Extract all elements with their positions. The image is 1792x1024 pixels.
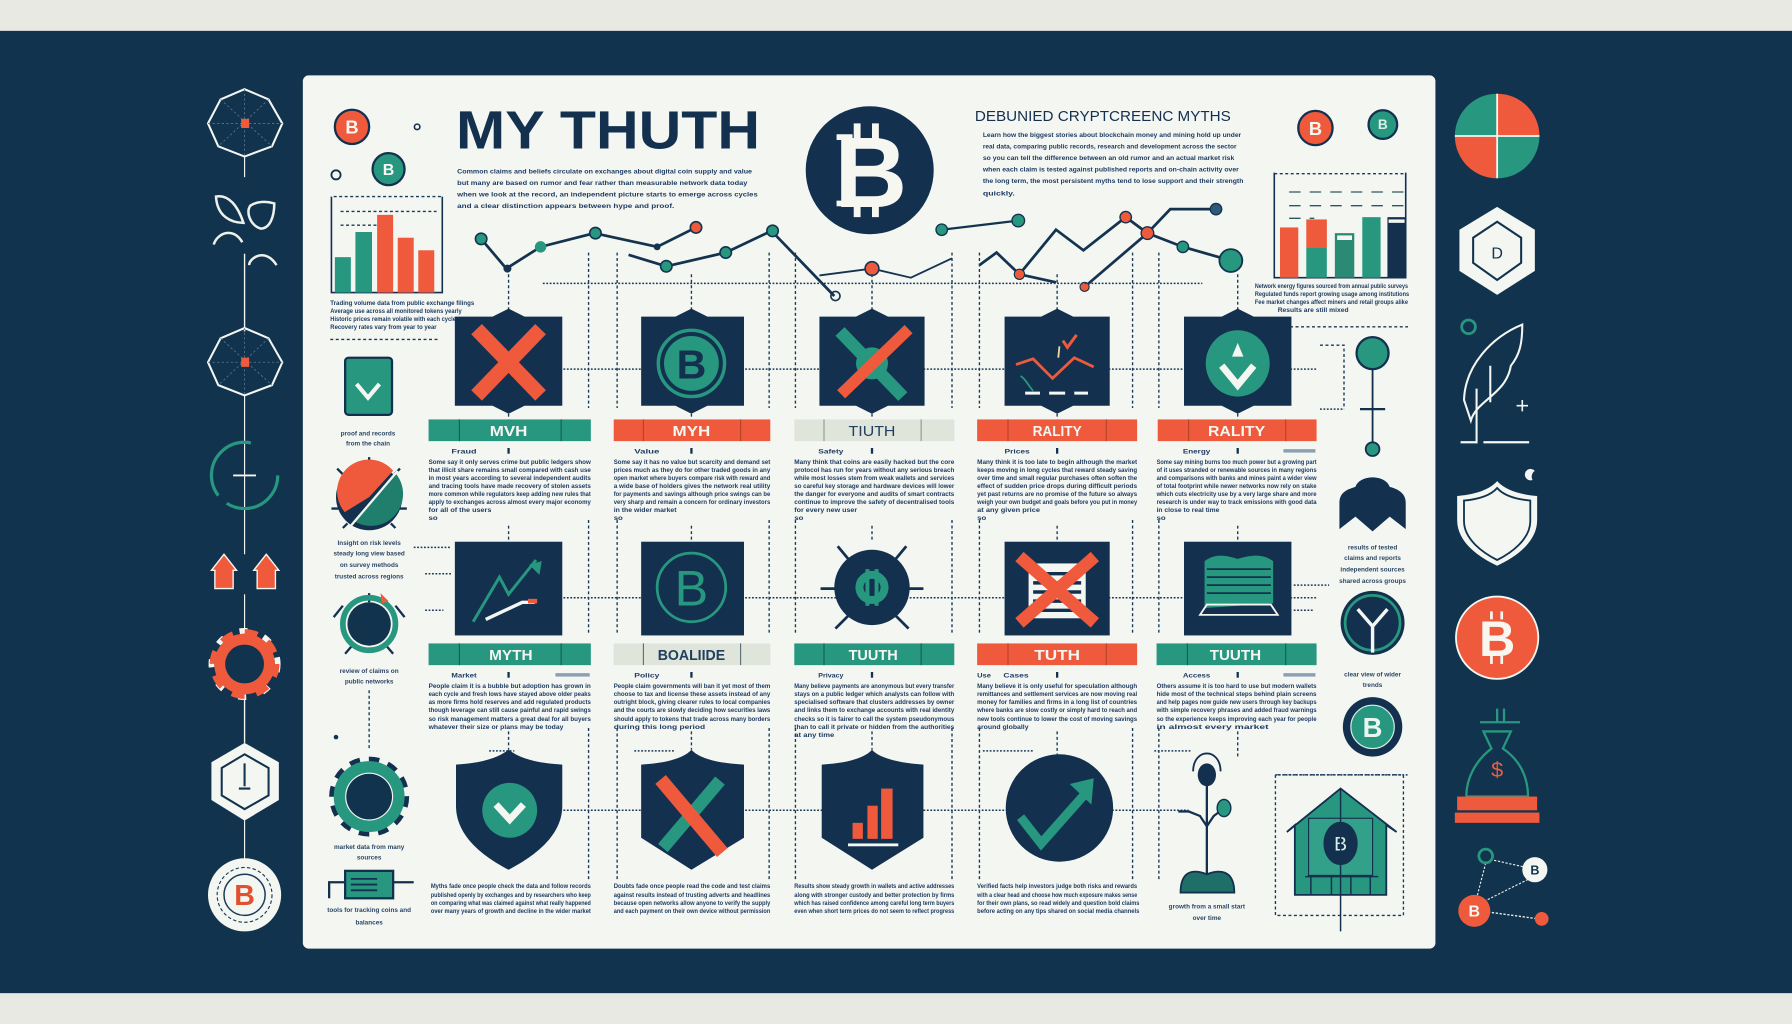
trend line charts [475, 203, 1242, 301]
text block row two column three: and links them to exchange accounts with real identity [794, 707, 954, 714]
caption: cloud: shared across groups [1339, 578, 1406, 585]
text block column four: weigh your own budget and goals before you put in money [976, 499, 1137, 506]
icon: virus coin [821, 546, 923, 629]
text block column three: while most losses stem from weak wallets and services [793, 475, 954, 482]
text block row three column four: before acting on any tips shared on social media channels [977, 908, 1140, 915]
text block column four: over time and small regular purchases often soften the [977, 475, 1137, 482]
text block column two: a wide base of holders gives the network real utility [614, 483, 770, 490]
text block row two column one: though leverage can still cause painful and rapid swings [429, 707, 591, 714]
line chart one [475, 222, 952, 301]
row two icons [455, 542, 1291, 635]
caption: device: balances [355, 920, 383, 927]
text block row two column five: Access [1183, 673, 1210, 680]
icon: teal bitcoin ring [1343, 697, 1402, 757]
text block column three: protocol has run for years without any serious breach [794, 467, 954, 474]
text block column two: Value [634, 449, 660, 456]
right inner column [1169, 337, 1406, 922]
text block row two column two: Policy [634, 673, 660, 680]
caption: Y circle [1344, 672, 1401, 689]
bar chart caption right: Results are still mixed [1278, 307, 1349, 314]
text block column one: for all of the users [429, 507, 492, 514]
text block row two column three [794, 672, 955, 739]
icon: teal ring gear [334, 593, 405, 654]
icon: pin stem [1320, 337, 1389, 456]
text block row three column one: Myths fade once people check the data and follow records [431, 883, 591, 890]
icon: quartered pie [1455, 94, 1539, 178]
caption: gear [334, 844, 405, 861]
text block column three: so [794, 515, 803, 522]
caption: cloud: independent sources [1340, 566, 1405, 573]
text block row two column two: during this long period [614, 724, 705, 731]
text block row two column one: so risk management matters a great deal for all buyers [429, 716, 591, 723]
text block column five [1156, 448, 1317, 522]
text block row two column three: specialised software that clusters addresses by owner [794, 699, 955, 706]
text block column one: Fraud [451, 449, 477, 456]
text block column one: that illicit share remains small compared with cash use [429, 467, 591, 474]
text block column four: Prices [1005, 449, 1030, 456]
text block row two column five: so the experience keeps improving each year for people [1157, 716, 1317, 723]
row three text blocks [431, 883, 1140, 915]
subtitle: DEBUNIED CRYPTCREENC MYTHS [975, 109, 1231, 125]
bar chart caption right: Network energy figures sourced from annual public surveys [1255, 283, 1408, 290]
row one labels [429, 419, 1317, 441]
text block column five: Energy [1183, 449, 1211, 456]
caption: ring gear: public networks [345, 678, 394, 685]
banner: myth red: MYH [673, 424, 710, 440]
text block row two column four: Cases [1003, 673, 1029, 680]
text block column one: Some say it only serves crime but public ledgers show [429, 459, 591, 466]
icon: compass octagon middle [208, 328, 282, 395]
text block row two column four: Many believe it is only useful for speculation although [977, 683, 1137, 690]
text block column four: so [977, 515, 986, 522]
icon: teal bitcoin shield: B [677, 341, 706, 387]
icon: coin network: B [1530, 863, 1539, 877]
text block column two: in the wider market [614, 507, 677, 514]
icon: crossed shield [641, 750, 744, 870]
banner: reality red two: RALITY [1208, 424, 1265, 440]
text block column one [429, 448, 591, 522]
bar chart caption left [330, 300, 474, 331]
text block row two column two: choose to tax and license these assets instead of any [614, 691, 770, 698]
text block column three: so careful key storage and hardware devices will lower [794, 483, 955, 490]
bar chart left [331, 197, 442, 293]
text block row two column two: and the courts are slowly deciding how securities laws [614, 707, 770, 714]
text block row three column four: for their own plans, so read widely and question bold claims [977, 900, 1140, 907]
icon: bar chart shield [822, 750, 923, 870]
text block row three column three [793, 883, 954, 915]
icon: red bitcoin coin [1456, 597, 1538, 679]
text block row three column one: over many years of growth and decline in the wider market [431, 908, 591, 915]
text block row two column five: and help pages now guide new users through key backups [1157, 699, 1317, 706]
caption: gauge: trusted across regions [335, 573, 404, 580]
icon: gauge [331, 456, 407, 530]
caption: gauge [333, 540, 405, 580]
bar chart caption right: Regulated funds report growing usage among institutions [1255, 291, 1409, 298]
icon: falling chart shield [1005, 309, 1110, 414]
title: MY THUTH [456, 101, 760, 161]
bar chart right [1274, 173, 1406, 278]
top left coins: B [383, 162, 394, 179]
text block column three: for every new user [794, 507, 857, 514]
text block row two column three: Privacy [818, 673, 844, 680]
icon: teal bitcoin shield [641, 309, 744, 414]
intro paragraph: and a clear distinction appears between hype and proof. [457, 203, 674, 210]
icon: Y circle [1341, 591, 1405, 655]
caption: Y circle: trends [1363, 682, 1383, 689]
caption: gear: sources [357, 854, 382, 861]
top right coins: B [1309, 118, 1322, 139]
top right coins [1298, 110, 1397, 145]
icon: open book tile [1184, 542, 1291, 635]
text block row two column four: where banks are slow costly or simply hard to reach and [976, 707, 1137, 714]
left inner column [327, 358, 451, 927]
caption: device: tools for tracking coins and [327, 907, 411, 914]
icon: crossed bitcoin shield [819, 309, 925, 414]
text block column four: effect of sudden price drops during difficult periods [977, 483, 1137, 490]
text block column one: and tracing tools have made recovery of stolen assets [429, 483, 591, 490]
text block row three column two [614, 883, 770, 915]
banner: myth teal [429, 419, 591, 441]
text block column one: more common while regulators keep adding new rules that [429, 491, 591, 498]
icon: check shield [456, 750, 562, 870]
text block column five: of it uses stranded or renewable sources in many regions [1157, 467, 1317, 474]
icon: red bitcoin coin: B [1479, 610, 1515, 667]
text block row two column three: at any time [794, 732, 834, 739]
icon: dark cloud tree [1339, 477, 1406, 531]
text block row two column one: each cycle and fresh lows have stayed above older peaks [429, 691, 591, 698]
text block row three column three: even when short term prices do not seem to reflect progress [794, 908, 954, 915]
text block column five: which cuts electricity use by a very large share and more [1156, 491, 1317, 498]
banner: reality red two [1158, 419, 1317, 441]
line chart two [936, 203, 1242, 291]
bar chart caption right [1255, 283, 1409, 314]
icon: checkmark circle [1006, 754, 1113, 862]
caption: cloud: claims and reports [1344, 555, 1401, 562]
icon: leaves outline [214, 196, 277, 265]
text block row two column five [1156, 672, 1317, 731]
right intro paragraph: Learn how the biggest stories about blockchain money and mining hold up under [983, 132, 1241, 139]
top right coins: B [1378, 117, 1388, 132]
bar chart caption left: Trading volume data from public exchange filings [330, 300, 474, 307]
text block row three column three: Results show steady growth in wallets and active addresses [794, 883, 954, 890]
text block row two column one [428, 672, 591, 731]
banner: reality light: BOALIIDE [658, 648, 725, 664]
text block row two column four: new tools continue to lower the cost of moving savings [977, 716, 1137, 723]
right intro paragraph: when each claim is tested against published reports and on-chain activity over [982, 166, 1239, 173]
caption: device [327, 907, 411, 927]
icon: myth red cross [455, 309, 562, 414]
text block row three column four [976, 883, 1140, 915]
text block row two column four: around globally [977, 724, 1029, 731]
banner: truth teal two [1157, 643, 1317, 665]
icon: feather leaf [1461, 320, 1529, 443]
text block row three column two: against results instead of trusting adverts and headlines [614, 892, 770, 899]
icon: reality check shield [1184, 309, 1291, 414]
caption: Y circle: clear view of wider [1344, 672, 1401, 679]
bar chart caption left: Recovery rates vary from year to year [330, 324, 437, 331]
text block row two column four: money for families and firms in a long list of countries [977, 699, 1137, 706]
text block row two column one: as more firms hold reserves and add regulated products [429, 699, 591, 706]
right intro paragraph: real data, comparing public records, research and development across the sector [983, 144, 1237, 151]
text block row two column four [976, 672, 1137, 731]
bar chart caption right: Fee market changes affect miners and retail groups alike [1255, 299, 1408, 306]
icon: rising chart tile [455, 542, 562, 635]
text block row three column one: published openly by exchanges and by researchers who keep [431, 892, 591, 899]
row three icons [456, 750, 1408, 931]
text block row two column five: hide most of the technical steps behind plain screens [1157, 691, 1317, 698]
icon: bitcoin outline tile: B [675, 560, 708, 617]
text block column five: Some say mining burns too much power but a growing part [1157, 459, 1317, 466]
text block column one: so [429, 515, 438, 522]
text block column one: apply to exchanges across almost every major economy [429, 499, 591, 506]
caption: ring gear [340, 668, 399, 685]
text block column three: the danger for everyone and audits of smart contracts [794, 491, 954, 498]
text block row three column four: Verified facts help investors judge both risks and rewards [977, 883, 1137, 890]
banner: myth teal row two: MYTH [489, 648, 533, 664]
icon: money bag [1455, 709, 1539, 823]
text block row three column three: along with stronger custody and better protection by firms [794, 892, 954, 899]
caption: gauge: Insight on risk levels [338, 540, 401, 547]
icon: hexagon badge: D [1491, 245, 1503, 262]
intro paragraph: but many are based on rumor and fear rather than measurable network data today [457, 180, 748, 187]
caption: ring gear: review of claims on [340, 668, 399, 675]
text block column five: in close to real time [1157, 507, 1220, 514]
text block row two column three: Many believe payments are anonymous but every transfer [794, 683, 955, 690]
text block column four: Many think it is too late to begin although the market [977, 459, 1138, 466]
text block column two: open market where buyers compare risk with reward and [614, 475, 770, 482]
banner: truth teal two: TUUTH [1210, 648, 1261, 664]
icon: red up arrows [211, 554, 279, 589]
text block row three column two: because open networks allow anyone to verify the supply [614, 900, 770, 907]
bar chart caption left: Historic prices remain volatile with each cycle [330, 316, 456, 323]
text block row two column two: People claim governments will ban it yet most of them [614, 683, 770, 690]
text block row two column three: stays on a public ledger which analysts can follow with [794, 691, 954, 698]
text block row three column one: on comparing what was claimed against what really happened [431, 900, 591, 907]
caption: gear: market data from many [334, 844, 405, 851]
icon: white shield [1457, 469, 1537, 566]
text block column one: in most years according to several independent audits [429, 475, 591, 482]
text block row two column four: remittances and settlement services are now moving real [977, 691, 1137, 698]
icon: compass octagon top [208, 89, 282, 157]
banner: myth teal: MVH [490, 424, 527, 440]
text block row two column two: should apply to tokens that trade across many borders [614, 716, 770, 723]
top left coins [331, 110, 420, 185]
banner: truth teal: TUUTH [849, 648, 898, 664]
row two text blocks [428, 672, 1317, 739]
caption: tablet: from the chain [346, 441, 390, 448]
text block row two column three: than to call it private or hidden from the authorities [794, 724, 954, 731]
banner: myth red [614, 419, 770, 441]
text block row two column five: Others assume it is too hard to use but modern wallets [1157, 683, 1317, 690]
icon: teal target ring [211, 442, 278, 509]
text block column four [976, 448, 1138, 522]
icon: house with coin [1275, 775, 1408, 931]
icon: device screen [329, 871, 414, 898]
banner: truth light [794, 419, 954, 441]
row one text blocks [429, 448, 1317, 522]
banner: truth red [977, 643, 1137, 665]
caption: tablet [341, 430, 396, 448]
caption: sprout: over time [1193, 915, 1222, 922]
intro paragraph: Common claims and beliefs circulate on exchanges about digital coin supply and value [457, 169, 752, 176]
icon: bitcoin outline tile [641, 542, 744, 635]
right intro paragraph: so you can tell the difference between an old rumor and an actual market risk [983, 155, 1234, 162]
text block column five: of total footprint while newer networks now rely on stake [1157, 483, 1317, 490]
text block row two column two [614, 672, 770, 731]
text block column three [793, 448, 955, 522]
right intro paragraph [982, 132, 1243, 197]
text block row two column one: whatever their size or plans may be today [428, 724, 564, 731]
icon: teal gear [333, 760, 406, 833]
right sidebar icons [1455, 94, 1549, 927]
text block row three column three: which has raised confidence among careful long term buyers [793, 900, 954, 907]
banner: reality red: RALITY [1033, 424, 1082, 440]
text block row three column two: and each payment on their own device without permission [614, 908, 770, 915]
text block column three: continue to improve the safety of decentralised tools [794, 499, 954, 506]
text block column four: at any given price [977, 507, 1040, 514]
intro paragraph: when we look at the record, an independent picture starts to emerge across cycles [456, 192, 758, 199]
text block row two column five: in almost every market [1157, 724, 1270, 731]
banner: reality red [977, 419, 1137, 441]
text block column four: keeps moving in long cycles that reward steady saving [977, 467, 1137, 474]
icon: hexagon badge [1459, 207, 1535, 295]
text block row two column three: checks so it is fairer to call the system pseudonymous [794, 716, 954, 723]
text block row three column one [431, 883, 591, 915]
icon: tablet with check [345, 358, 392, 415]
caption: tablet: proof and records [341, 430, 396, 437]
banner: truth red: TUTH [1034, 648, 1080, 664]
caption: sprout: growth from a small start [1169, 904, 1246, 911]
text block column three: Many think that coins are easily hacked but the core [794, 459, 954, 466]
text block column five: research is under way to track emissions with good data [1157, 499, 1317, 506]
text block column two: prices much as they do for other traded goods in any [614, 467, 770, 474]
right intro paragraph: the long term, the most persistent myths tend to lose support and their strength [983, 178, 1243, 185]
caption: sprout [1169, 904, 1246, 922]
text block row three column two: Doubts fade once people read the code and test claims [614, 883, 770, 890]
text block column two [614, 448, 771, 522]
right intro paragraph: quickly. [983, 190, 1015, 197]
main white panel [303, 75, 1435, 949]
icon: big bitcoin circle: B [835, 117, 907, 229]
text block row three column four: with a clear head and choose how much exposure makes sense [976, 892, 1137, 899]
text block row two column five: with simple recovery phrases and added fraud warnings [1156, 707, 1317, 714]
icon: house with coin: B [1334, 833, 1347, 855]
text block column two: Some say it has no value but scarcity and demand set [614, 459, 771, 466]
top left coins: B [345, 117, 359, 138]
icon: sprout stem [1178, 753, 1234, 893]
row one shields [455, 309, 1291, 414]
caption: gauge: steady long view based [333, 550, 405, 557]
text block column four: yet past returns are no promise of the future so always [977, 491, 1137, 498]
icon: bitcoin seal [208, 858, 281, 931]
text block row two column one: People claim it is a bubble but adoption has grown in [429, 683, 591, 690]
row two labels [429, 643, 1317, 665]
banner: reality light [614, 643, 770, 665]
banner: truth teal [794, 643, 954, 665]
text block row two column four: Use [977, 673, 991, 680]
icon: coin network: B [1469, 904, 1480, 921]
bar chart caption left: Average use across all monitored tokens yearly [330, 308, 462, 315]
icon: coin network [1458, 849, 1549, 927]
caption: cloud [1339, 545, 1406, 585]
icon: bitcoin seal: B [234, 880, 255, 912]
text block column five: so [1157, 515, 1166, 522]
icon: big bitcoin circle [806, 106, 934, 234]
intro paragraph [456, 169, 758, 210]
text block row two column one: Market [451, 673, 477, 680]
caption: gauge: on survey methods [340, 562, 399, 569]
icon: crossed document tile [1005, 542, 1110, 635]
text block column two: so [614, 515, 623, 522]
dashed connector grid [489, 253, 1317, 880]
text block row two column two: outright block, giving clearer rules to local companies [614, 699, 770, 706]
icon: money bag: $ [1491, 757, 1503, 782]
banner: truth light: TIUTH [849, 424, 895, 440]
text block column two: very sharp and remain a concern for ordinary investors [614, 499, 770, 506]
text block column five: and comparisons with banks and mines paint a wider view [1157, 475, 1317, 482]
caption: cloud: results of tested [1348, 545, 1397, 552]
icon: red gear [211, 631, 278, 697]
icon: teal bitcoin ring: B [1363, 712, 1382, 743]
text block column two: for payments and savings although price swings can be [614, 491, 770, 498]
text block column three: Safety [818, 449, 844, 456]
banner: myth teal row two [429, 643, 591, 665]
left sidebar icons [208, 89, 282, 931]
icon: white hexagon [211, 743, 279, 821]
